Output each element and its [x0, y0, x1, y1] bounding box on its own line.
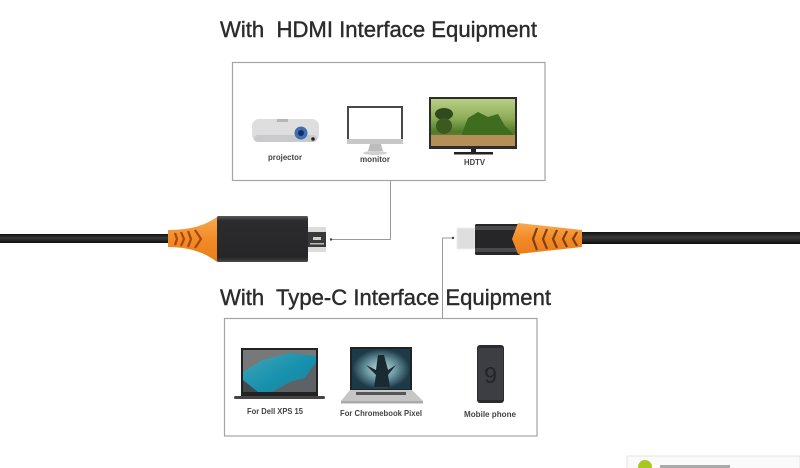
label: monitor: monitor [360, 154, 391, 164]
arrow: panel to HDMI plug [330, 180, 390, 241]
icon: HDTV [429, 97, 517, 154]
label: Chromebook Pixel: For Chromebook Pixel [340, 408, 422, 418]
browser popup fragment [627, 456, 800, 468]
HDMI metal tip [308, 227, 326, 252]
strain relief [512, 223, 582, 254]
title: Type-C equipment: With Type-C Interface Equipment [220, 285, 551, 310]
label: HDTV: HDTV [464, 157, 485, 167]
label: projector: projector [268, 152, 303, 162]
icon: Chromebook Pixel laptop [341, 347, 423, 404]
label: Dell XPS 15: For Dell XPS 15 [247, 406, 303, 416]
connector body [475, 224, 520, 255]
icon: projector [252, 119, 319, 142]
strain relief [168, 217, 217, 262]
cable [580, 232, 800, 244]
cable: HDMI side [0, 216, 326, 262]
title: HDMI equipment: With HDMI Interface Equipment [220, 17, 537, 42]
cable: Type-C side [457, 223, 800, 255]
icon: monitor [347, 106, 403, 155]
arrow: panel to Type-C plug [442, 237, 454, 318]
icon: mobile phone: 9 [484, 362, 497, 388]
cable [0, 234, 170, 243]
label: mobile phone: Mobile phone [464, 409, 516, 419]
USB-C metal tip [457, 228, 475, 249]
panel: HDMI interface equipment [232, 62, 545, 180]
connector body [217, 216, 308, 262]
icon: Dell XPS 15 laptop [234, 348, 325, 399]
panel: Type-C interface equipment [224, 318, 537, 436]
icon: mobile phone [477, 345, 504, 403]
